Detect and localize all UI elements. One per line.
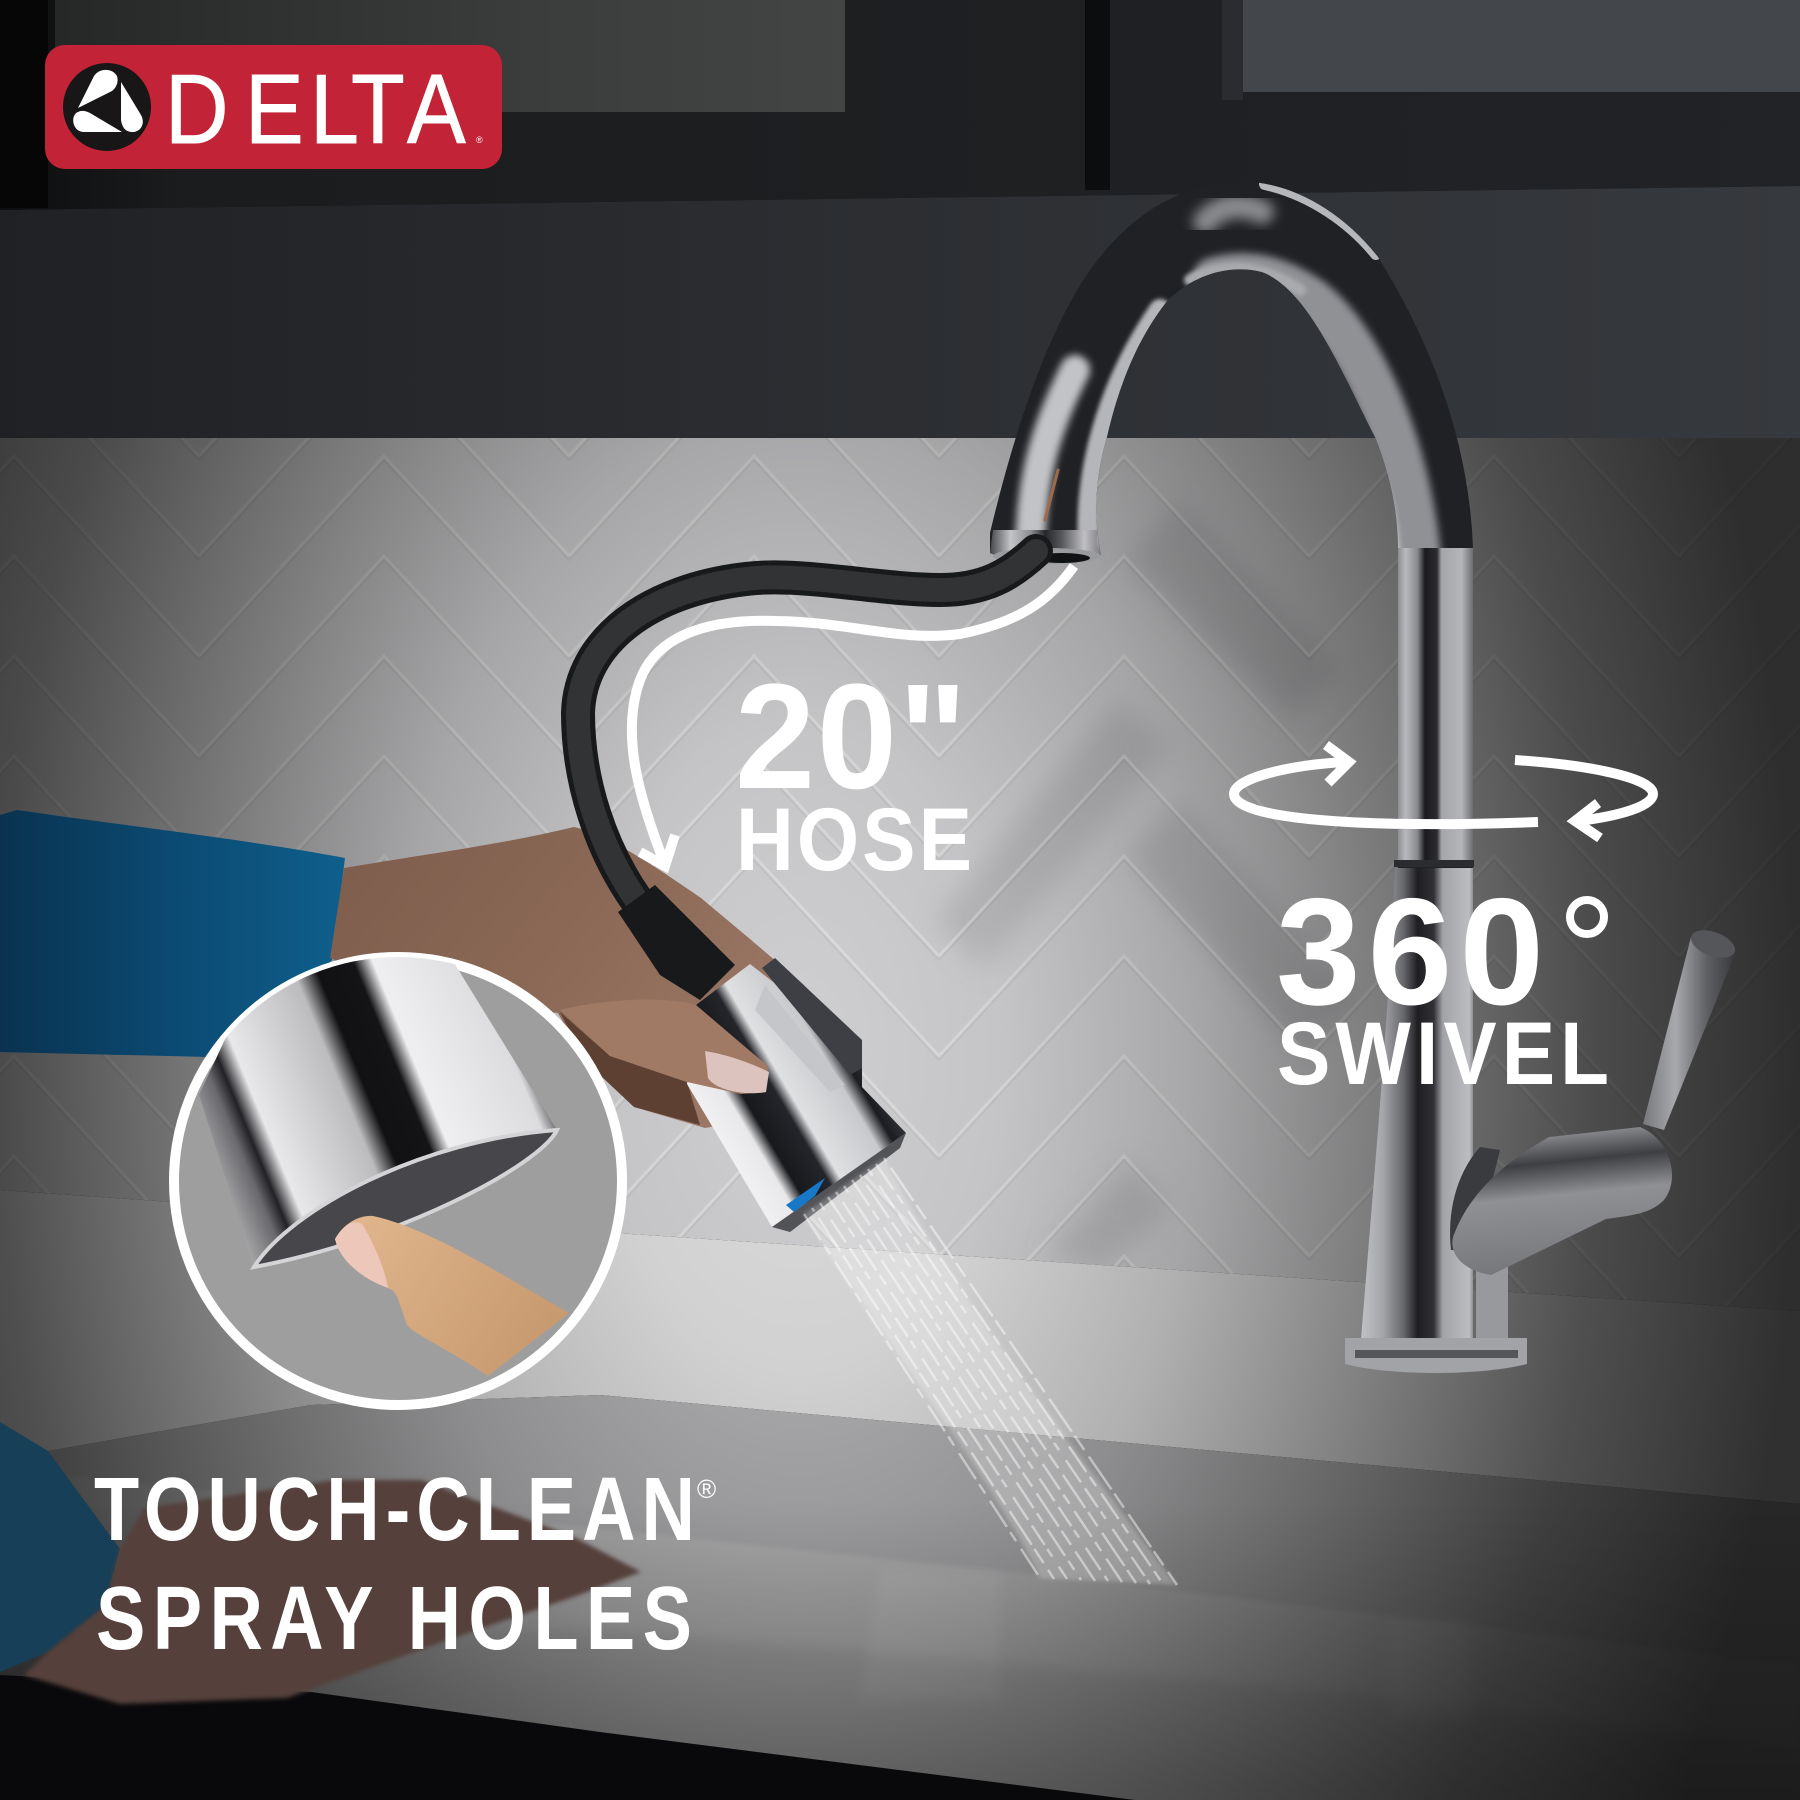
- faucet: [990, 182, 1739, 1373]
- handle body: [1452, 1127, 1672, 1275]
- inset fingernail: [335, 1222, 388, 1288]
- registered mark: ®: [697, 1474, 716, 1504]
- faucet neck and arch: [990, 182, 1473, 870]
- logo wordmark: DELTA: [165, 53, 466, 164]
- sprayer head: [687, 958, 906, 1232]
- inset spray holes rim: [254, 1130, 557, 1267]
- touch-clean label: [94, 1459, 716, 1669]
- degree symbol: [1570, 900, 1604, 934]
- water stream: [804, 1158, 1177, 1585]
- inset chrome spray head: [199, 940, 557, 1267]
- label line two: SPRAY HOLES: [96, 1568, 692, 1669]
- touch-clean zoom inset: [174, 940, 622, 1405]
- lower sleeve: [0, 1422, 120, 1672]
- logo background: [45, 45, 502, 169]
- handle support: [1476, 1262, 1508, 1338]
- hose arrow: [632, 566, 1074, 866]
- backsplash: herringbone marble tile: [0, 436, 1800, 1311]
- inset finger: [335, 1216, 569, 1376]
- thumbnail: [705, 1051, 769, 1093]
- upper sleeve: [0, 810, 345, 1058]
- lower hand: [24, 1480, 641, 1704]
- countertop: [0, 1190, 1800, 1800]
- arch highlights: [1030, 184, 1420, 600]
- swivel label: SWIVEL: [1277, 1003, 1609, 1103]
- label line one: TOUCH-CLEAN: [94, 1459, 695, 1560]
- base ring: [1345, 1338, 1527, 1373]
- hose length callout: [632, 566, 1074, 889]
- hose connector: [618, 885, 735, 1000]
- thumb: [560, 1000, 768, 1094]
- logo badge: [45, 45, 502, 169]
- hand holding sprayer: [330, 551, 1036, 1232]
- lever: [1643, 937, 1735, 1130]
- cabinet base: [0, 1675, 1135, 1800]
- hose label: HOSE: [736, 789, 972, 889]
- logo registered mark: ®: [476, 135, 483, 145]
- swivel value: 360: [1276, 867, 1544, 1037]
- hose: [578, 551, 1036, 905]
- swivel callout: [1234, 745, 1653, 1103]
- inset ring: [174, 957, 622, 1405]
- spout end: [990, 530, 1101, 564]
- handle arm: [1450, 1147, 1500, 1250]
- hose value: 20": [735, 653, 967, 821]
- neck stripes: [1398, 548, 1473, 866]
- palm and fingers: [330, 827, 804, 1128]
- finger shadow: [560, 1012, 700, 1125]
- background: window wall band: [0, 0, 1800, 438]
- logo mark: [63, 63, 151, 151]
- cone body: [1361, 868, 1473, 1340]
- swivel arrows: [1234, 745, 1653, 838]
